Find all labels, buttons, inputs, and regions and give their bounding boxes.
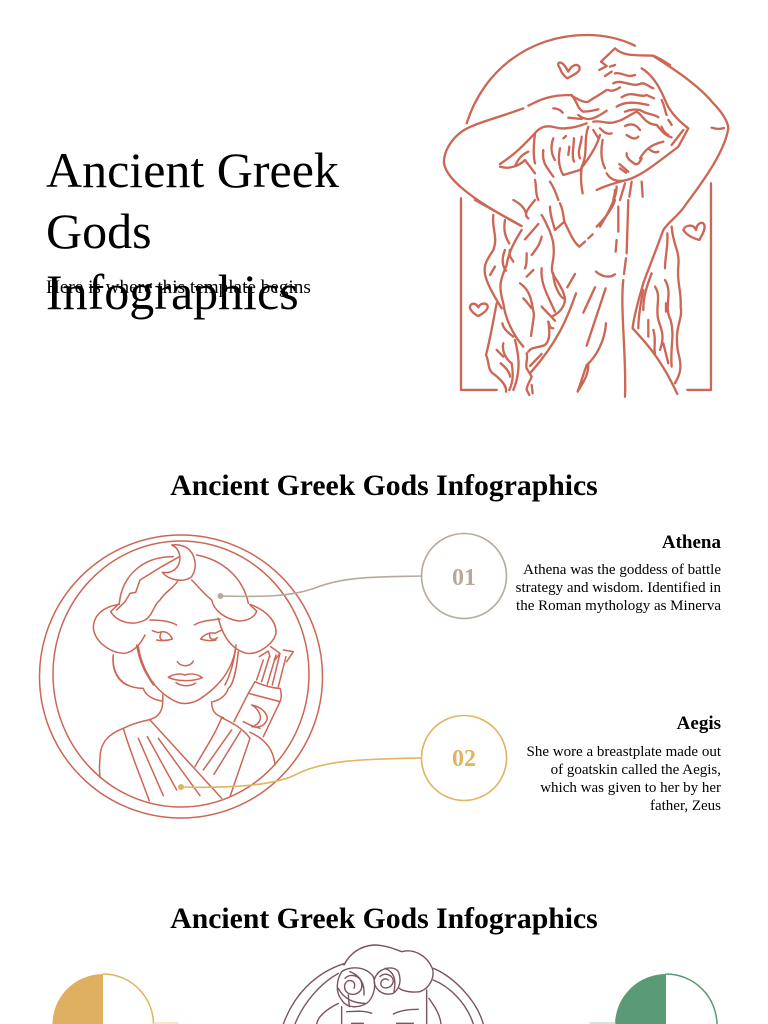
number circle 01 [422, 534, 506, 618]
illustration: goddess with long hair [444, 35, 728, 397]
number 02: 02 [452, 746, 476, 772]
text: Athena description [516, 562, 721, 614]
title [46, 142, 339, 320]
text: Athena description: Athena was the goddess of battle [523, 562, 721, 578]
number 01: 01 [452, 565, 476, 591]
subtitle: Here is where this template begins [46, 277, 311, 298]
text: Aegis description: of goatskin called the Aegis, [551, 762, 721, 778]
title: Infographics [46, 264, 299, 320]
text: Aegis description: which was given to her by her [540, 780, 721, 796]
title: Gods [46, 203, 152, 259]
title: Ancient Greek [46, 142, 339, 198]
connector 02 [178, 758, 421, 790]
green half-filled circle [590, 974, 717, 1024]
text: Aegis description: She wore a breastplate made out [526, 744, 721, 760]
text: Aegis description [526, 744, 721, 814]
heading: Athena: Athena [662, 532, 721, 553]
yellow half-filled circle [52, 974, 178, 1024]
illustration: Athena portrait medallion [40, 535, 322, 818]
illustration: goddess with roses [283, 945, 483, 1024]
text: Athena description: the Roman mythology as Minerva [516, 598, 721, 614]
section heading 2: Ancient Greek Gods Infographics [170, 903, 598, 935]
connector 01 [218, 576, 421, 599]
text: Athena description: strategy and wisdom. Identified in [516, 580, 721, 596]
text: Aegis description: father, Zeus [650, 798, 721, 814]
number circle 02 [422, 716, 506, 800]
heading: Aegis: Aegis [677, 713, 721, 734]
section heading 1: Ancient Greek Gods Infographics [170, 470, 598, 502]
